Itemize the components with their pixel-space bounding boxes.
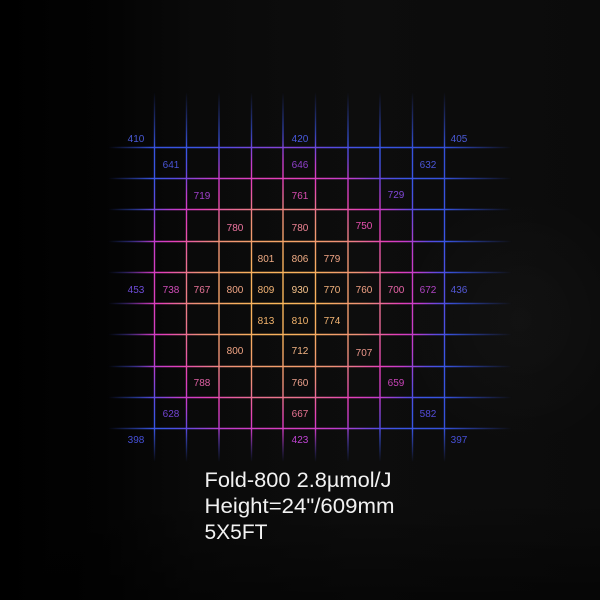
PPFD values: 659 [388, 378, 405, 389]
PPFD values: 800 [227, 285, 244, 296]
PPFD values: 806 [292, 254, 309, 265]
PPFD values: 779 [324, 254, 341, 265]
PPFD values: 672 [420, 285, 437, 296]
PPFD values: 760 [356, 285, 373, 296]
PPFD values: 813 [258, 316, 275, 327]
PPFD values: 761 [292, 191, 309, 202]
PPFD values: 641 [163, 160, 180, 171]
PPFD values: 410 [128, 134, 145, 145]
PPFD values: 646 [292, 160, 309, 171]
PPFD values: 712 [292, 346, 309, 357]
vertical grid lines [154, 92, 444, 462]
PPFD values: 667 [292, 409, 309, 420]
PPFD values: 420 [292, 134, 309, 145]
PPFD values: 729 [388, 190, 405, 201]
PPFD values: 750 [356, 221, 373, 232]
PPFD values: 398 [128, 435, 145, 446]
caption: Fold-800 2.8µmol/J [204, 469, 392, 492]
PPFD values [128, 134, 468, 446]
caption: Height=24"/609mm [204, 495, 394, 518]
PPFD values: 423 [292, 435, 309, 446]
PPFD values: 405 [451, 134, 468, 145]
bottom shading [0, 500, 600, 600]
PPFD values: 767 [194, 285, 211, 296]
PPFD values: 700 [388, 285, 405, 296]
horizontal grid lines [108, 148, 512, 428]
PPFD values: 774 [324, 316, 341, 327]
PPFD values: 780 [292, 223, 309, 234]
PPFD values: 930 [292, 285, 309, 296]
PPFD values: 719 [194, 191, 211, 202]
PPFD values: 632 [420, 160, 437, 171]
PPFD values: 800 [227, 346, 244, 357]
PPFD values: 770 [324, 285, 341, 296]
caption: 5X5FT [204, 521, 268, 544]
PPFD values: 436 [451, 285, 468, 296]
PPFD values: 780 [227, 223, 244, 234]
PPFD values: 707 [356, 348, 373, 359]
PPFD values: 760 [292, 378, 309, 389]
PPFD values: 628 [163, 409, 180, 420]
PPFD values: 397 [451, 435, 468, 446]
PPFD values: 801 [258, 254, 275, 265]
PPFD values: 810 [292, 316, 309, 327]
soft background glow [400, 190, 600, 450]
PPFD values: 738 [163, 285, 180, 296]
PPFD values: 788 [194, 378, 211, 389]
PPFD values: 453 [128, 285, 145, 296]
PPFD values: 582 [420, 409, 437, 420]
PPFD values: 809 [258, 285, 275, 296]
caption [204, 469, 394, 544]
